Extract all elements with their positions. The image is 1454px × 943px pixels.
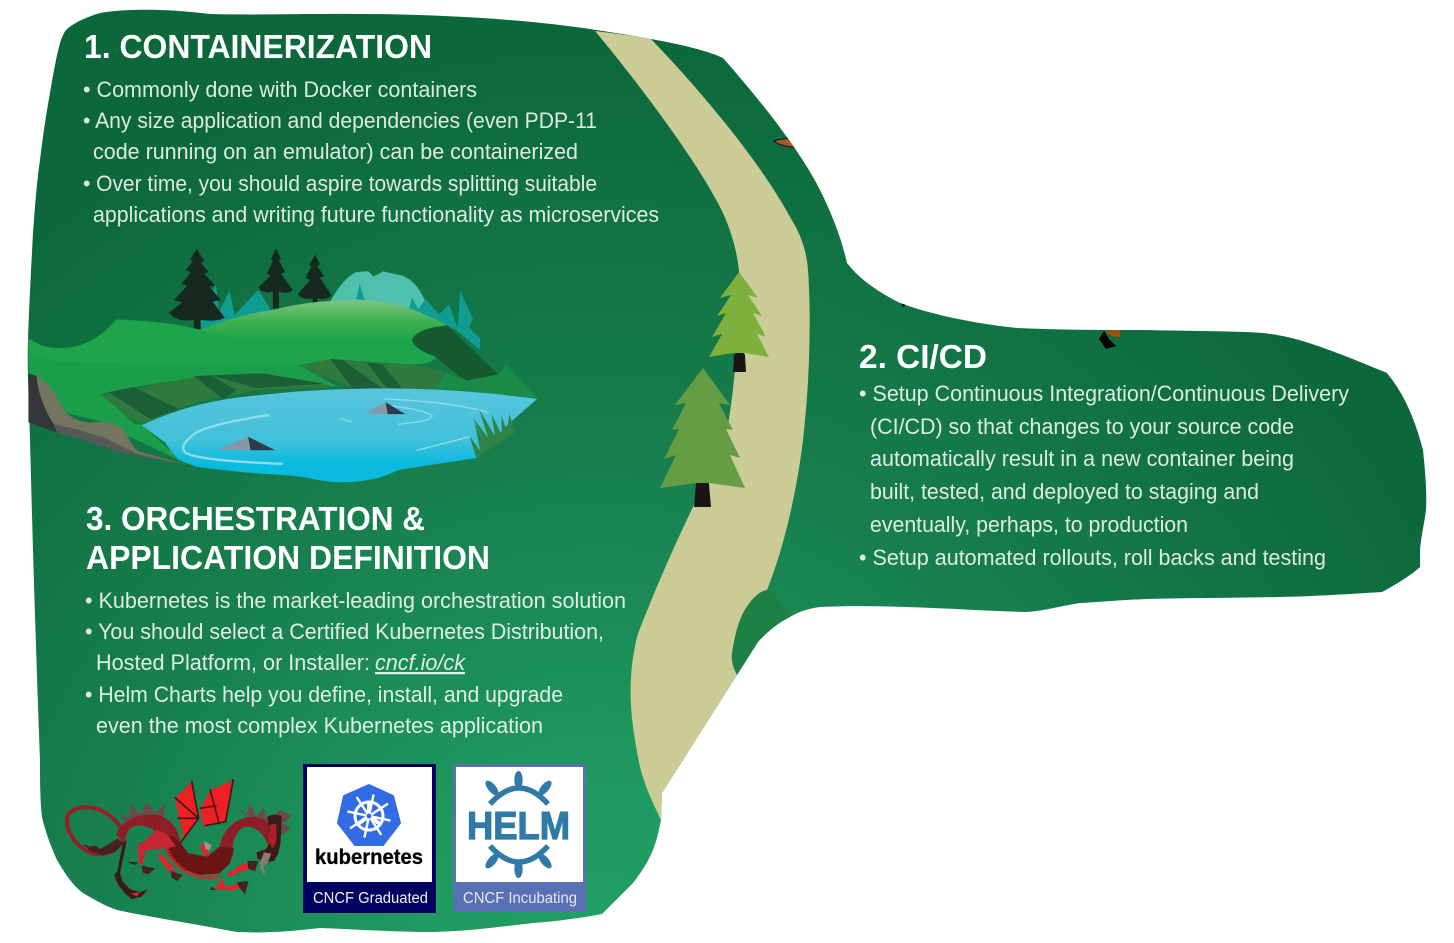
icon: boot and leaf near CI/CD top — [1099, 330, 1120, 349]
text block: CI/CD bullets: • Setup Continuous Integration/Continuous Delivery — [859, 381, 1350, 406]
section 3: orchestration and application definition — [85, 500, 626, 738]
illustration: darker lower meadow band — [28, 353, 338, 465]
icon: dragon tail loop — [67, 807, 123, 854]
heading: CI/CD: 2. CI/CD — [859, 338, 987, 375]
icon: dragon jaw tusks — [260, 852, 271, 877]
section 2: CI/CD — [859, 338, 1350, 570]
icon: dragon head — [257, 814, 282, 862]
illustration: dark hillside — [412, 326, 498, 381]
icon: wing ribs — [175, 779, 233, 843]
illustration: dark pine trees — [169, 248, 332, 330]
illustration: teal background spikes — [201, 284, 480, 350]
text block: CI/CD bullets: automatically result in a new container being — [870, 446, 1294, 471]
heading: orchestration and application definition: 3. ORCHESTRATION & — [86, 500, 425, 537]
text block: containerization bullets: code running on an emulator) can be containerized — [93, 139, 578, 164]
label: helm wordmark: HELM — [467, 805, 570, 848]
text block: orchestration bullets: • Kubernetes is the market-leading orchestration solution — [85, 588, 626, 613]
text block: containerization bullets — [83, 77, 659, 227]
label: kubernetes wordmark: kubernetes — [315, 846, 423, 869]
text block: orchestration bullets — [85, 588, 626, 738]
illustration: distant mountain — [331, 271, 426, 316]
illustration: left earth terrace — [100, 374, 338, 424]
text block: orchestration bullets: • Helm Charts help you define, install, and upgrade — [85, 682, 563, 707]
icon: kubernetes heptagon — [338, 785, 400, 845]
illustration: lake water — [142, 389, 537, 482]
illustration: winding trail path — [595, 31, 810, 822]
icon: dragon tail shadow — [83, 838, 123, 855]
icon: dragon upper chest and hind thigh — [137, 830, 176, 865]
text block: orchestration bullets: • You should select a Certified Kubernetes Distribution, — [85, 619, 604, 644]
icon: dragon legs — [159, 843, 257, 890]
heading: containerization: 1. CONTAINERIZATION — [84, 28, 432, 65]
illustration: reeds — [470, 409, 515, 458]
illustration: lake landscape — [28, 248, 537, 482]
icon: dragon torso — [166, 834, 234, 875]
icon: dragon body back — [116, 815, 181, 850]
icon: dragon neck — [219, 817, 277, 857]
illustration: small green hill beside trail — [732, 590, 790, 675]
illustration: right grass bank — [434, 365, 537, 398]
illustration: light green hilltop — [199, 300, 447, 340]
text block: containerization bullets: • Commonly done with Docker containers — [83, 77, 477, 102]
icon: dragon tail tip highlight — [131, 892, 140, 896]
text block: orchestration bullets: even the most complex Kubernetes application — [96, 713, 543, 738]
icon: helm wheel — [483, 771, 554, 878]
text block: CI/CD bullets: • Setup automated rollouts, roll backs and testing — [859, 545, 1326, 570]
section 1: containerization — [83, 28, 659, 227]
illustration: left terrace shadows — [109, 374, 324, 419]
icon: dragon wings — [175, 780, 233, 840]
icon: boot mark near CI/CD edge — [900, 303, 906, 307]
badge: kubernetes CNCF graduated — [303, 764, 436, 913]
illustration: lake rocks — [218, 402, 405, 450]
illustration: right terrace shadows — [330, 359, 402, 389]
text block: CI/CD bullets: built, tested, and deployed to staging and — [870, 479, 1259, 504]
text block: orchestration bullets: Hosted Platform, or Installer: — [96, 650, 370, 675]
text block: containerization bullets: • Over time, you should aspire towards splitting suitable — [83, 171, 597, 196]
icon: red dragon — [67, 779, 292, 899]
icon: dragon back spikes — [119, 802, 292, 837]
icon: fallen leaf on trail edge — [773, 138, 794, 148]
illustration: rock mid shadow — [54, 424, 189, 465]
illustration: right earth terrace — [299, 359, 444, 389]
icon: dragon shoulder highlight — [204, 841, 212, 850]
illustration: rocky shore — [28, 374, 189, 465]
label: CNCF incubating: CNCF Incubating — [463, 890, 577, 907]
heading: orchestration and application definition — [86, 500, 490, 576]
label: CNCF graduated: CNCF Graduated — [313, 890, 428, 907]
illustration: lake ripples — [183, 399, 488, 464]
text block: containerization bullets: applications and writing future functionality as microservices — [93, 202, 659, 227]
text block: CI/CD bullets — [859, 381, 1350, 570]
text block: containerization bullets: • Any size application and dependencies (even PDP-11 — [83, 108, 597, 133]
icon: dragon belly ridges — [167, 848, 219, 877]
icon: dragon head red scales — [269, 823, 277, 848]
text block: CI/CD bullets: eventually, perhaps, to production — [870, 512, 1188, 537]
illustration: darker green pine tree — [660, 368, 745, 507]
text block: CI/CD bullets: (CI/CD) so that changes to your source code — [870, 414, 1294, 439]
heading: orchestration and application definition: APPLICATION DEFINITION — [86, 539, 490, 576]
text block: orchestration bullets: cncf.io/ck — [375, 650, 467, 675]
badge: helm CNCF incubating — [453, 764, 586, 912]
illustration: main green meadow — [28, 319, 436, 465]
illustration: light green pine tree — [709, 272, 769, 372]
icon: dragon claws — [127, 861, 258, 894]
icon: dragon tail tip — [114, 840, 148, 899]
illustration: rock shadow — [28, 374, 57, 433]
